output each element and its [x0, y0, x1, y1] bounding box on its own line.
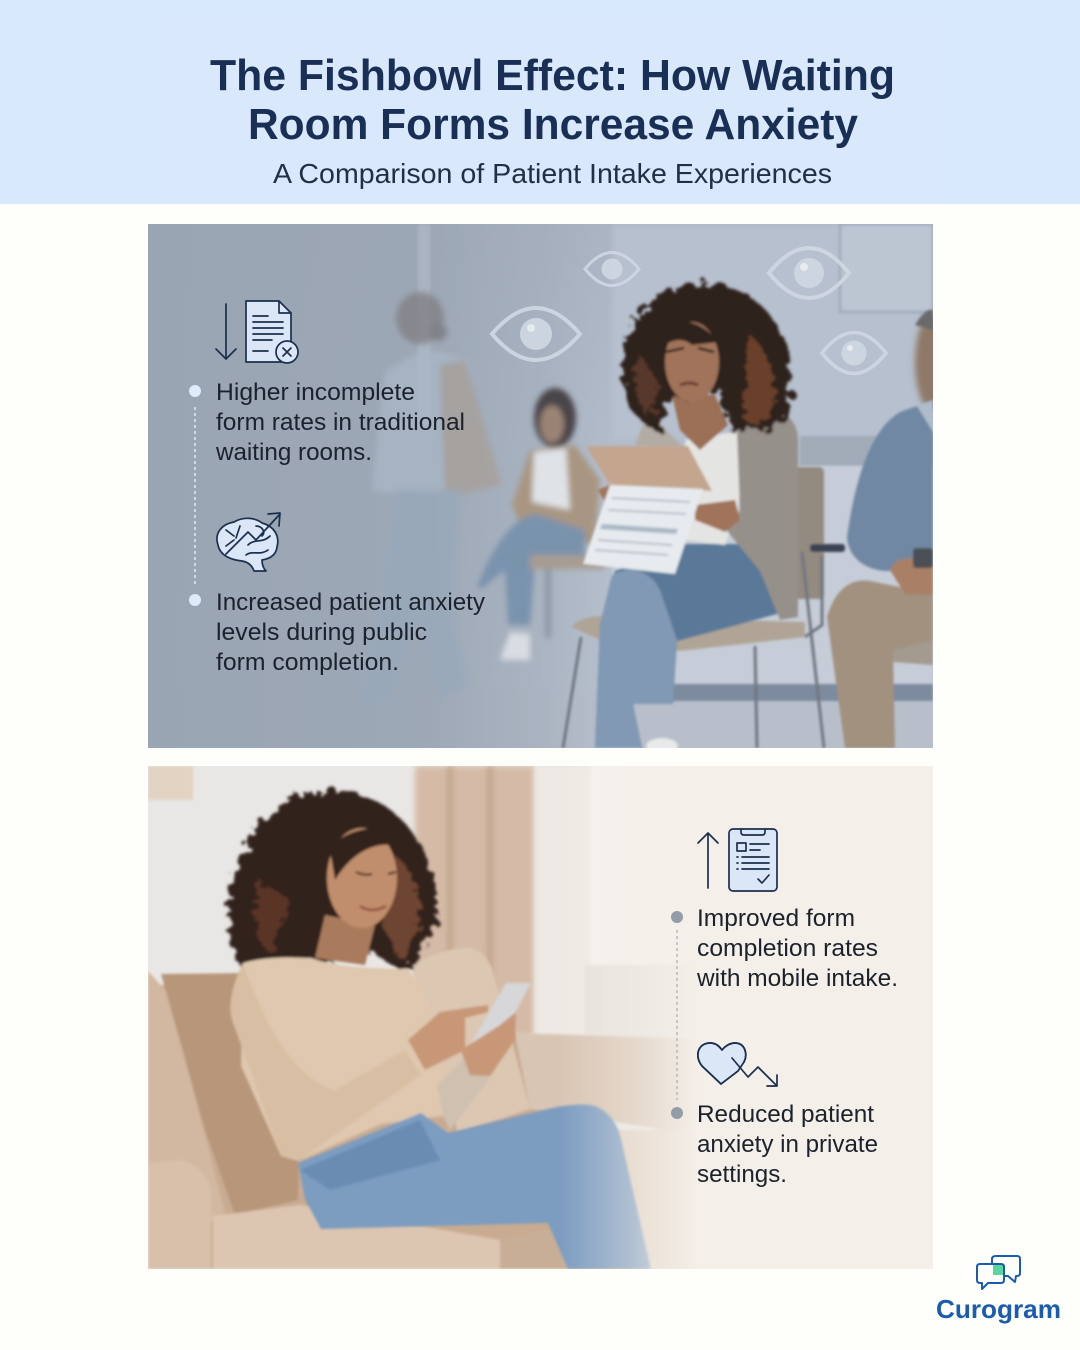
subtitle: A Comparison of Patient Intake Experiences	[273, 158, 832, 189]
hand	[695, 500, 740, 532]
logo icon: chat bubbles	[977, 1256, 1020, 1289]
eye icons overlay	[492, 248, 886, 374]
jeans	[613, 542, 778, 642]
hair	[228, 790, 437, 968]
point 3 text: with mobile intake.	[696, 965, 898, 992]
logo wordmark: Curogram	[936, 1294, 1061, 1324]
left text scrim	[148, 224, 618, 748]
eye large left	[492, 308, 580, 360]
panel: traditional waiting room	[148, 224, 949, 754]
man on right	[826, 308, 933, 748]
point 2 text: form completion.	[216, 649, 399, 676]
point 3 text: Improved form	[697, 905, 855, 932]
walking woman in background	[374, 290, 502, 494]
title: Room Forms Increase Anxiety	[248, 100, 859, 149]
paper form	[583, 485, 703, 574]
point 3 icon: clipboard with up arrow	[698, 829, 777, 891]
sofa	[148, 948, 700, 1269]
anxious woman's chair	[563, 467, 845, 748]
waiting room background	[436, 224, 933, 748]
eye mid right	[822, 332, 886, 374]
point 1 text: Higher incomplete	[216, 379, 415, 406]
point 1 icon: document with down arrow	[216, 301, 298, 363]
shoe	[645, 737, 679, 748]
relaxed woman with phone	[228, 790, 651, 1269]
face	[327, 828, 397, 928]
hair	[622, 283, 790, 432]
point 1 text: form rates in traditional	[216, 409, 465, 436]
neck	[672, 395, 728, 450]
white top	[685, 430, 745, 545]
point 3 text	[696, 905, 898, 992]
jeans	[298, 1105, 651, 1269]
face	[665, 322, 719, 402]
right text scrim	[560, 766, 933, 1269]
clipboard	[586, 446, 712, 491]
point 4 icon: heart with down arrow	[698, 1043, 777, 1086]
timeline connector	[189, 385, 201, 606]
header band	[0, 0, 1080, 204]
title: The Fishbowl Effect: How Waiting	[210, 51, 895, 100]
point 4 text: settings.	[697, 1161, 787, 1188]
panel: private mobile intake	[148, 766, 933, 1269]
anxious woman with clipboard	[583, 283, 798, 754]
point 1 text	[215, 379, 465, 466]
background wall edge	[418, 224, 430, 350]
point 2 text	[216, 589, 485, 676]
living room background	[148, 766, 667, 1269]
eye small top	[585, 252, 639, 286]
point 3 text: completion rates	[697, 935, 878, 962]
cardigan	[727, 411, 798, 620]
hands	[408, 1005, 488, 1070]
Curogram logo	[936, 1256, 1061, 1324]
phone	[471, 982, 531, 1044]
point 4 text: Reduced patient	[697, 1101, 874, 1128]
point 2 icon: brain with up arrow	[217, 513, 280, 571]
eye top right	[769, 248, 849, 298]
timeline connector	[671, 911, 683, 1119]
neck	[315, 915, 375, 965]
sweater	[241, 957, 448, 1161]
point 4 text	[697, 1101, 878, 1188]
point 2 text: levels during public	[216, 619, 427, 646]
point 1 text: waiting rooms.	[215, 439, 372, 466]
point 4 text: anxiety in private	[697, 1131, 878, 1158]
seated woman in background	[478, 388, 605, 660]
title	[210, 51, 895, 149]
point 2 text: Increased patient anxiety	[216, 589, 485, 616]
